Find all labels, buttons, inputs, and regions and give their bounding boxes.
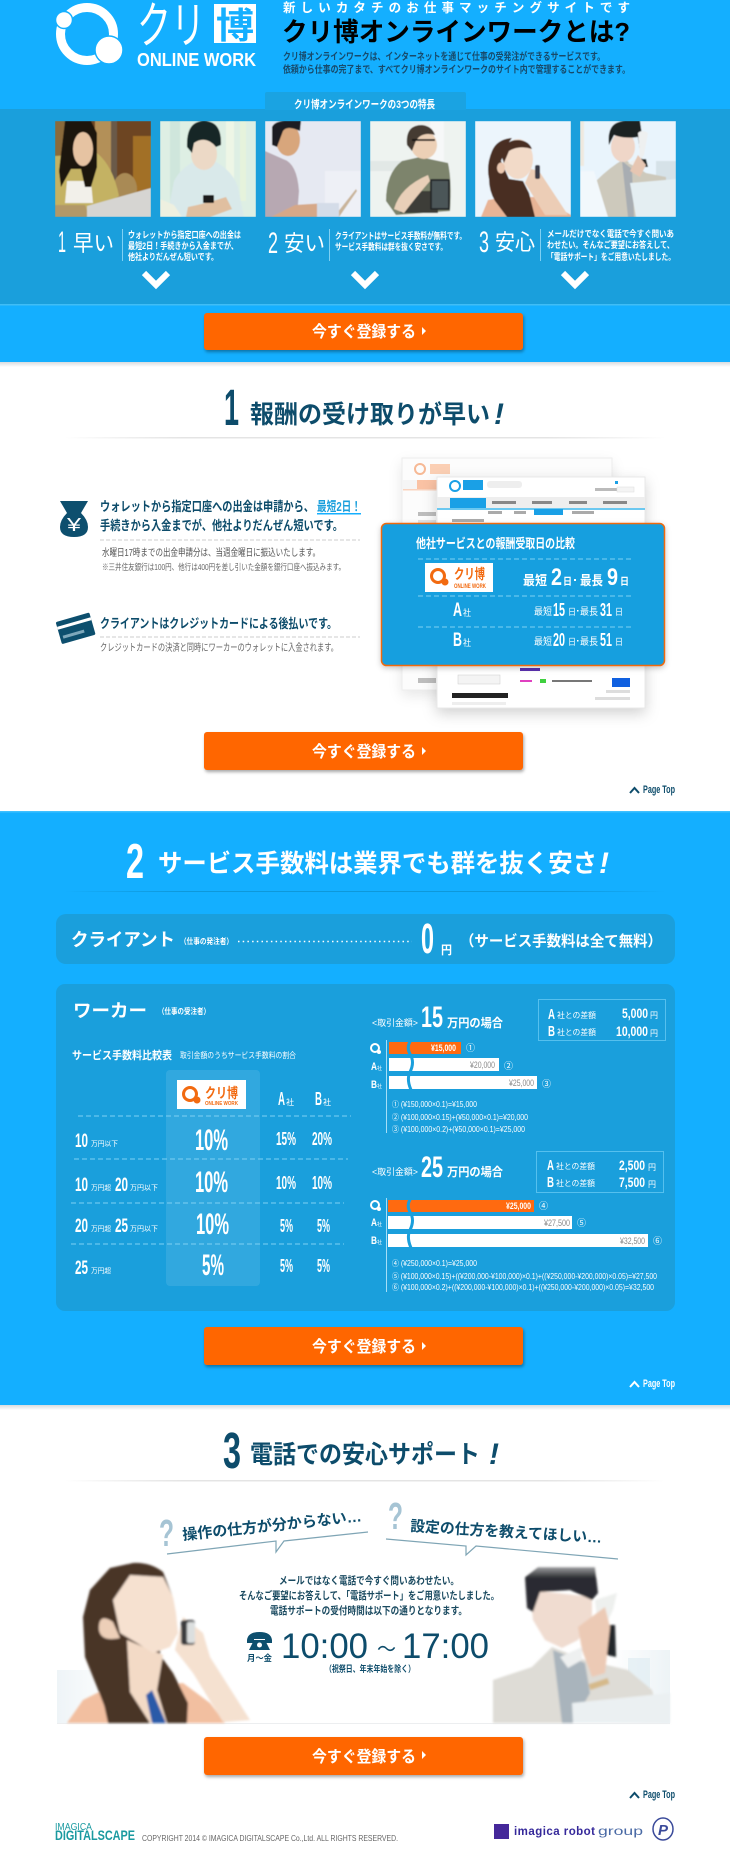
- row: company B payout days: 社: [463, 637, 471, 648]
- logo: orange kuri-haku: [425, 563, 493, 592]
- panel: client fee: （サービス手数料は全て無料）: [460, 932, 662, 950]
- bar labels: A: [371, 1217, 377, 1229]
- difference box: 250k: 社との差額: [556, 1161, 595, 1171]
- difference box: 150k: 5,000: [622, 1005, 648, 1021]
- photo: woman with glasses and tablet: [370, 121, 466, 217]
- photo: operator with telephone: [493, 1558, 670, 1723]
- panel: payout comparison: [382, 524, 664, 666]
- panel: client fee: 0: [421, 915, 434, 963]
- bar labels: [371, 1061, 382, 1091]
- row: 100k to 200k: 10%: [276, 1173, 296, 1193]
- section 2 heading: !: [599, 847, 609, 880]
- worker heading: （仕事の受注者）: [158, 1006, 210, 1016]
- icon: privacy mark: [653, 1818, 673, 1840]
- difference box: 250k: 円: [648, 1163, 656, 1172]
- formulas: 250k: [392, 1259, 657, 1292]
- icon: privacy mark: P: [658, 1822, 669, 1839]
- row: company B payout days: 日: [615, 637, 623, 647]
- bar labels: 社: [377, 1065, 382, 1072]
- row: 100k to 200k: 10%: [312, 1173, 332, 1193]
- speech bubble: right: ?: [388, 1496, 403, 1538]
- feature 2: 安い: [284, 231, 325, 256]
- link: page top: Page Top: [643, 1789, 675, 1801]
- text: support explanation: [239, 1574, 499, 1617]
- icon: money bag: [60, 501, 88, 537]
- feature 2: クライアントはサービス手数料が無料です。: [335, 230, 466, 241]
- row: over 250k: [75, 1249, 330, 1282]
- icon: chevron down 1: [144, 273, 168, 285]
- panel: worker fee: [56, 984, 675, 1311]
- support hours: 10:00: [281, 1627, 368, 1666]
- row: kuri-haku payout days: 9: [607, 564, 618, 591]
- row: up to 100k: [75, 1124, 332, 1157]
- formulas: 250k: ⑤ (¥100,000×0.15)+((¥200,000-¥100,000)×0.1)+((¥250,000-¥200,000)×0.05)=¥27,500: [392, 1272, 657, 1281]
- bar chart: 150k: [371, 1040, 551, 1133]
- fee table heading: 取引金額のうちサービス手数料の割合: [180, 1050, 296, 1060]
- column headers: [278, 1089, 331, 1109]
- text: withdrawal speed: ※三井住友銀行は100円、他行は400円を差し引いた金額を銀行口座へ振込みます。: [102, 562, 345, 572]
- support hours: 〜: [377, 1639, 396, 1661]
- difference box: 250k: 2,500: [619, 1157, 645, 1173]
- fee table heading: サービス手数料比較表: [72, 1048, 172, 1062]
- difference box: 250k: [536, 1152, 664, 1192]
- feature band: [0, 92, 730, 306]
- bar chart: 250k: ¥25,000: [506, 1201, 531, 1211]
- difference box: 150k: 社との差額: [557, 1027, 596, 1037]
- column headers: 社: [323, 1097, 331, 1107]
- row: up to 100k: 15%: [276, 1129, 296, 1149]
- link: page top: Page Top: [643, 1378, 675, 1390]
- row: 200k to 250k: [75, 1208, 330, 1241]
- icon: credit card: [56, 612, 96, 644]
- difference box: 150k: 円: [650, 1011, 658, 1020]
- feature 3: 安心: [495, 230, 535, 255]
- row: kuri-haku payout days: [523, 564, 629, 591]
- text: withdrawal speed: ウォレットから指定口座への出金は申請から、: [100, 499, 314, 514]
- link: page top: [630, 784, 675, 796]
- icon: telephone: 月〜金: [247, 1653, 272, 1663]
- bar chart: 150k: ¥25,000: [508, 1078, 534, 1088]
- hero section: [0, 0, 730, 362]
- difference box: 250k: 7,500: [619, 1174, 645, 1190]
- row: kuri-haku payout days: 最長: [580, 573, 603, 588]
- bar chart: 150k: ¥20,000: [469, 1060, 495, 1070]
- bar labels: 社: [377, 1239, 382, 1246]
- button: register: 今すぐ登録する: [312, 322, 416, 341]
- row: kuri-haku payout days: 日: [563, 576, 572, 588]
- section 3: phone support: [57, 1422, 675, 1801]
- icon: chevron down 2: [353, 273, 377, 285]
- fee table heading: [72, 1048, 296, 1062]
- feature 1: 他社よりだんぜん短いです。: [128, 251, 218, 262]
- speech bubble: right: 設定の仕方を教えてほしい…: [410, 1517, 602, 1547]
- photo: operator with telephone: [580, 121, 676, 217]
- case heading: 250k: <取引金額>: [372, 1166, 418, 1177]
- row: up to 100k: 20%: [312, 1129, 332, 1149]
- text: credit card payment: [100, 616, 360, 654]
- difference box: 150k: B: [548, 1023, 555, 1040]
- section 1 heading: [224, 379, 504, 436]
- case heading: 150k: <取引金額>: [372, 1017, 418, 1028]
- row: kuri-haku payout days: 日: [620, 576, 629, 588]
- photo: woman on mobile phone: [475, 121, 571, 217]
- row: 200k to 250k: 万円超: [91, 1224, 111, 1233]
- feature 3: わせたい。そんなご要望にお答えして、: [547, 239, 674, 250]
- difference box: 150k: [538, 1000, 666, 1040]
- logo: imagica digitalscape: DIGITALSCAPE: [55, 1827, 135, 1843]
- row: company B payout days: B: [453, 630, 462, 651]
- logo: kuri-haku online work: [56, 0, 256, 70]
- intro text: 依頼から仕事の完了まで、すべてクリ博オンラインワークのサイト内で管理することができます。: [283, 63, 630, 76]
- row: company B payout days: 最長: [580, 636, 598, 648]
- row: over 250k: 万円超: [91, 1266, 111, 1275]
- section 1: fast payment: [56, 379, 675, 796]
- feature 2: [268, 227, 466, 261]
- column headers: 社: [286, 1097, 294, 1107]
- row: 200k to 250k: 10%: [196, 1208, 229, 1241]
- text: credit card payment: クライアントはクレジットカードによる後払いです。: [100, 616, 337, 631]
- logo: imagica robot group: group: [598, 1826, 643, 1838]
- bar chart: 150k: ①: [466, 1043, 475, 1053]
- text: credit card payment: クレジットカードの決済と同時にワーカーのウォレットに入金されます。: [100, 641, 338, 654]
- difference box: 150k: 10,000: [616, 1023, 648, 1039]
- bar labels: B: [371, 1235, 377, 1247]
- difference box: 250k: 社との差額: [556, 1178, 595, 1188]
- speech bubble: left: ?: [159, 1513, 174, 1555]
- column headers: A: [278, 1089, 285, 1109]
- panel: client fee: 円: [441, 943, 452, 957]
- feature 3: 「電話サポート」をご用意いたしました。: [547, 251, 675, 262]
- formulas: 150k: ① (¥150,000×0.1)=¥15,000: [392, 1100, 477, 1109]
- logo: orange kuri-haku: ONLINE WORK: [205, 1101, 238, 1107]
- row: up to 100k: 10: [75, 1131, 88, 1152]
- feature 2: サービス手数料は群を抜く安さです。: [335, 241, 447, 252]
- bar labels: 社: [377, 1221, 382, 1228]
- worker heading: [73, 1001, 210, 1021]
- section 2: service fee: [0, 811, 730, 1405]
- intro text: [283, 50, 630, 76]
- difference box: 150k: 社との差額: [557, 1010, 596, 1020]
- bar chart: 150k: ②: [504, 1061, 513, 1071]
- logo: orange kuri-haku: クリ博: [454, 566, 485, 582]
- row: company A payout days: 日: [568, 607, 576, 617]
- speech bubble: right: [386, 1496, 618, 1559]
- row: company A payout days: A: [453, 600, 462, 621]
- feature 3: [479, 226, 675, 262]
- difference box: 150k: A: [548, 1006, 555, 1023]
- column headers: B: [315, 1089, 322, 1109]
- link: page top: [630, 1789, 675, 1801]
- support image backdrop: [57, 1650, 670, 1724]
- row: company A payout days: [453, 600, 623, 621]
- row: 200k to 250k: 万円以下: [130, 1225, 158, 1233]
- difference box: 250k: B: [547, 1174, 554, 1191]
- link: page top: [630, 1378, 675, 1390]
- icon: chevron down 3: [563, 273, 587, 285]
- support hours: （祝祭日、年末年始を除く）: [325, 1663, 415, 1674]
- bar chart: 250k: ⑥: [653, 1236, 662, 1246]
- support hours: 17:00: [402, 1627, 489, 1666]
- row: company A payout days: 日: [615, 607, 623, 617]
- row: 100k to 200k: 万円超: [91, 1183, 111, 1192]
- logo: imagica robot group: imagica robot: [514, 1826, 595, 1838]
- text: withdrawal speed: [100, 499, 361, 572]
- text: withdrawal speed: 手続きから入金までが、他社よりだんぜん短いです。: [100, 518, 343, 533]
- row: company B payout days: 最短: [534, 635, 552, 648]
- difference box: 250k: 円: [648, 1180, 656, 1189]
- button: register: [204, 313, 523, 350]
- link: page top: Page Top: [643, 784, 675, 796]
- panel: client fee: クライアント: [71, 930, 175, 950]
- front screenshot: [437, 477, 645, 708]
- bar labels: [371, 1217, 382, 1247]
- feature 1: 最短2日！手続きから入金までが、: [128, 240, 238, 251]
- feature 1: ウォレットから指定口座への出金は: [128, 229, 241, 240]
- section 1 heading: 報酬の受け取りが早い: [250, 400, 490, 429]
- main title: クリ博オンラインワークとは?: [282, 17, 630, 47]
- photo: woman with laptop: [55, 121, 151, 217]
- copyright: COPYRIGHT 2014 © IMAGICA DIGITALSCAPE Co.,Ltd. ALL RIGHTS RESERVED.: [142, 1834, 398, 1843]
- logo: imagica robot group: [494, 1824, 643, 1839]
- back screenshot: [402, 458, 612, 690]
- row: 100k to 200k: 20: [115, 1175, 128, 1196]
- row: 100k to 200k: 10: [75, 1175, 88, 1196]
- bar chart: 250k: ¥27,500: [543, 1218, 570, 1228]
- bar labels: A: [371, 1061, 377, 1073]
- support hours: [281, 1627, 489, 1674]
- row: 200k to 250k: 5%: [280, 1216, 293, 1236]
- row: 100k to 200k: 万円以下: [130, 1184, 158, 1192]
- formulas: 150k: ② (¥100,000×0.15)+(¥50,000×0.1)=¥20,000: [392, 1113, 528, 1122]
- row: 200k to 250k: 20: [75, 1216, 88, 1237]
- text: withdrawal speed: 最短2日！: [317, 499, 361, 514]
- row: company A payout days: 31: [600, 600, 612, 620]
- bar chart: 250k: ④: [539, 1201, 548, 1211]
- formulas: 250k: ④ (¥250,000×0.1)=¥25,000: [392, 1259, 477, 1268]
- button: register: 今すぐ登録する: [312, 1337, 416, 1356]
- case heading: 250k: 万円の場合: [447, 1164, 503, 1179]
- panel title: 他社サービスとの報酬受取日の比較: [416, 536, 575, 551]
- row: company B payout days: 51: [600, 630, 612, 650]
- bar labels: 社: [377, 1083, 382, 1090]
- fee comparison table: [71, 1070, 351, 1286]
- feature 1: [58, 226, 241, 262]
- intro text: クリ博オンラインワークは、インターネットを通じて仕事の受発注ができるサービスです。: [283, 50, 605, 63]
- fee comparison table: 5%: [317, 1256, 330, 1276]
- row: 100k to 200k: [75, 1166, 332, 1199]
- fee comparison table: 5%: [317, 1216, 330, 1236]
- row: 200k to 250k: 25: [115, 1216, 128, 1237]
- bar chart: 150k: ¥15,000: [431, 1043, 456, 1053]
- row: company B payout days: 20: [553, 630, 565, 650]
- feature 1: 1: [58, 226, 66, 259]
- case heading: 150k: 万円の場合: [447, 1015, 503, 1030]
- button: register: [204, 1327, 523, 1365]
- photo: smiling man with laptop: [265, 121, 361, 217]
- text: support explanation: そんなご要望にお答えして、「電話サポート」をご用意いたしました。: [239, 1589, 499, 1602]
- footer: [55, 1818, 673, 1843]
- logo: orange kuri-haku: ONLINE WORK: [454, 584, 486, 590]
- feature 3: 3: [479, 226, 489, 259]
- bar chart: 150k: ③: [542, 1079, 551, 1089]
- case heading: 150k: 15: [421, 1001, 443, 1034]
- panel: client fee: [56, 914, 675, 964]
- row: company A payout days: 15: [553, 600, 565, 620]
- logo: imagica digitalscape: IMAGICA: [55, 1822, 92, 1833]
- text: withdrawal speed: 水曜日17時までの出金申請分は、当週金曜日に振込いたします。: [102, 546, 320, 559]
- section 2 heading: サービス手数料は業界でも群を抜く安さ: [158, 850, 597, 878]
- speech bubble: left: 操作の仕方が分からない…: [182, 1507, 362, 1544]
- case heading: 250k: 25: [421, 1151, 443, 1184]
- text: support explanation: 電話サポートの受付時間は以下の通りとなります。: [270, 1604, 467, 1617]
- section 2 heading: [126, 835, 609, 889]
- row: up to 100k: 10%: [195, 1124, 228, 1157]
- logo: orange kuri-haku: クリ博: [205, 1085, 238, 1101]
- formulas: 150k: [392, 1100, 528, 1134]
- formulas: 250k: ⑥ (¥100,000×0.2)+((¥200,000-¥100,000)×0.1)+((¥250,000-¥200,000)×0.05)=¥32,500: [392, 1283, 654, 1292]
- screenshot logo: [450, 480, 483, 491]
- text: support explanation: メールではなく電話で今すぐ問いあわせたい。: [279, 1574, 459, 1587]
- button: register: [204, 732, 523, 770]
- button: register: [204, 1737, 523, 1775]
- section 3 heading: 3: [223, 1422, 241, 1479]
- photo: man with smartphone: [160, 121, 256, 217]
- icon: bar logo: [371, 1044, 381, 1054]
- logo: kuri-haku online work: ONLINE WORK: [137, 50, 256, 70]
- photo: woman on mobile phone: [67, 1563, 250, 1723]
- bar chart: 250k: ⑤: [577, 1218, 586, 1228]
- row: company A payout days: 最短: [534, 605, 552, 618]
- row: 100k to 200k: 10%: [195, 1166, 228, 1199]
- difference box: 250k: A: [547, 1157, 554, 1174]
- bar labels: B: [371, 1079, 377, 1091]
- case heading: 250k: [372, 1151, 503, 1184]
- logo: kuri-haku online work: 博: [216, 5, 254, 46]
- row: company B payout days: 日: [568, 637, 576, 647]
- case heading: 150k: [372, 1001, 503, 1034]
- speech bubble: left: [159, 1507, 368, 1555]
- icon: bar logo: [371, 1201, 381, 1211]
- bar chart: 250k: ¥32,500: [619, 1236, 645, 1246]
- row: over 250k: 5%: [202, 1249, 224, 1282]
- formulas: 150k: ③ (¥100,000×0.2)+(¥50,000×0.1)=¥25,000: [392, 1125, 525, 1134]
- icon: telephone: [247, 1632, 272, 1663]
- row: company B payout days: [453, 630, 623, 651]
- section 3 heading: !: [489, 1438, 499, 1471]
- row: over 250k: 5%: [280, 1256, 293, 1276]
- row: kuri-haku payout days: 最短: [523, 573, 547, 588]
- logo: imagica digitalscape: [55, 1822, 135, 1843]
- row: over 250k: 25: [75, 1258, 88, 1279]
- worker heading: ワーカー: [73, 1001, 147, 1021]
- feature 3: メールだけでなく電話で今すぐ問いあ: [547, 228, 674, 239]
- section 3 heading: 電話での安心サポート: [250, 1441, 480, 1469]
- section 3 heading: [223, 1422, 499, 1479]
- icon: money bag: ¥: [66, 515, 82, 535]
- button: register: 今すぐ登録する: [312, 742, 416, 761]
- section 2 heading: 2: [126, 835, 144, 889]
- section 1 heading: 1: [224, 379, 239, 436]
- bar chart: 250k: [371, 1198, 662, 1292]
- row: up to 100k: 万円以下: [91, 1140, 118, 1148]
- row: company A payout days: 社: [463, 607, 471, 618]
- section 1 heading: !: [494, 398, 504, 431]
- feature 1: 早い: [73, 231, 114, 256]
- difference box: 150k: 円: [650, 1029, 658, 1038]
- row: kuri-haku payout days: 2: [551, 564, 562, 591]
- row: company A payout days: 最長: [580, 606, 598, 618]
- logo: orange kuri-haku: [177, 1080, 246, 1109]
- feature 2: 2: [268, 227, 278, 260]
- button: register: 今すぐ登録する: [312, 1747, 416, 1766]
- feature tab label: クリ博オンラインワークの3つの特長: [294, 97, 435, 111]
- panel: client fee: （仕事の発注者）: [180, 936, 233, 946]
- tagline: 新しいカタチのお仕事マッチングサイトです: [283, 0, 630, 15]
